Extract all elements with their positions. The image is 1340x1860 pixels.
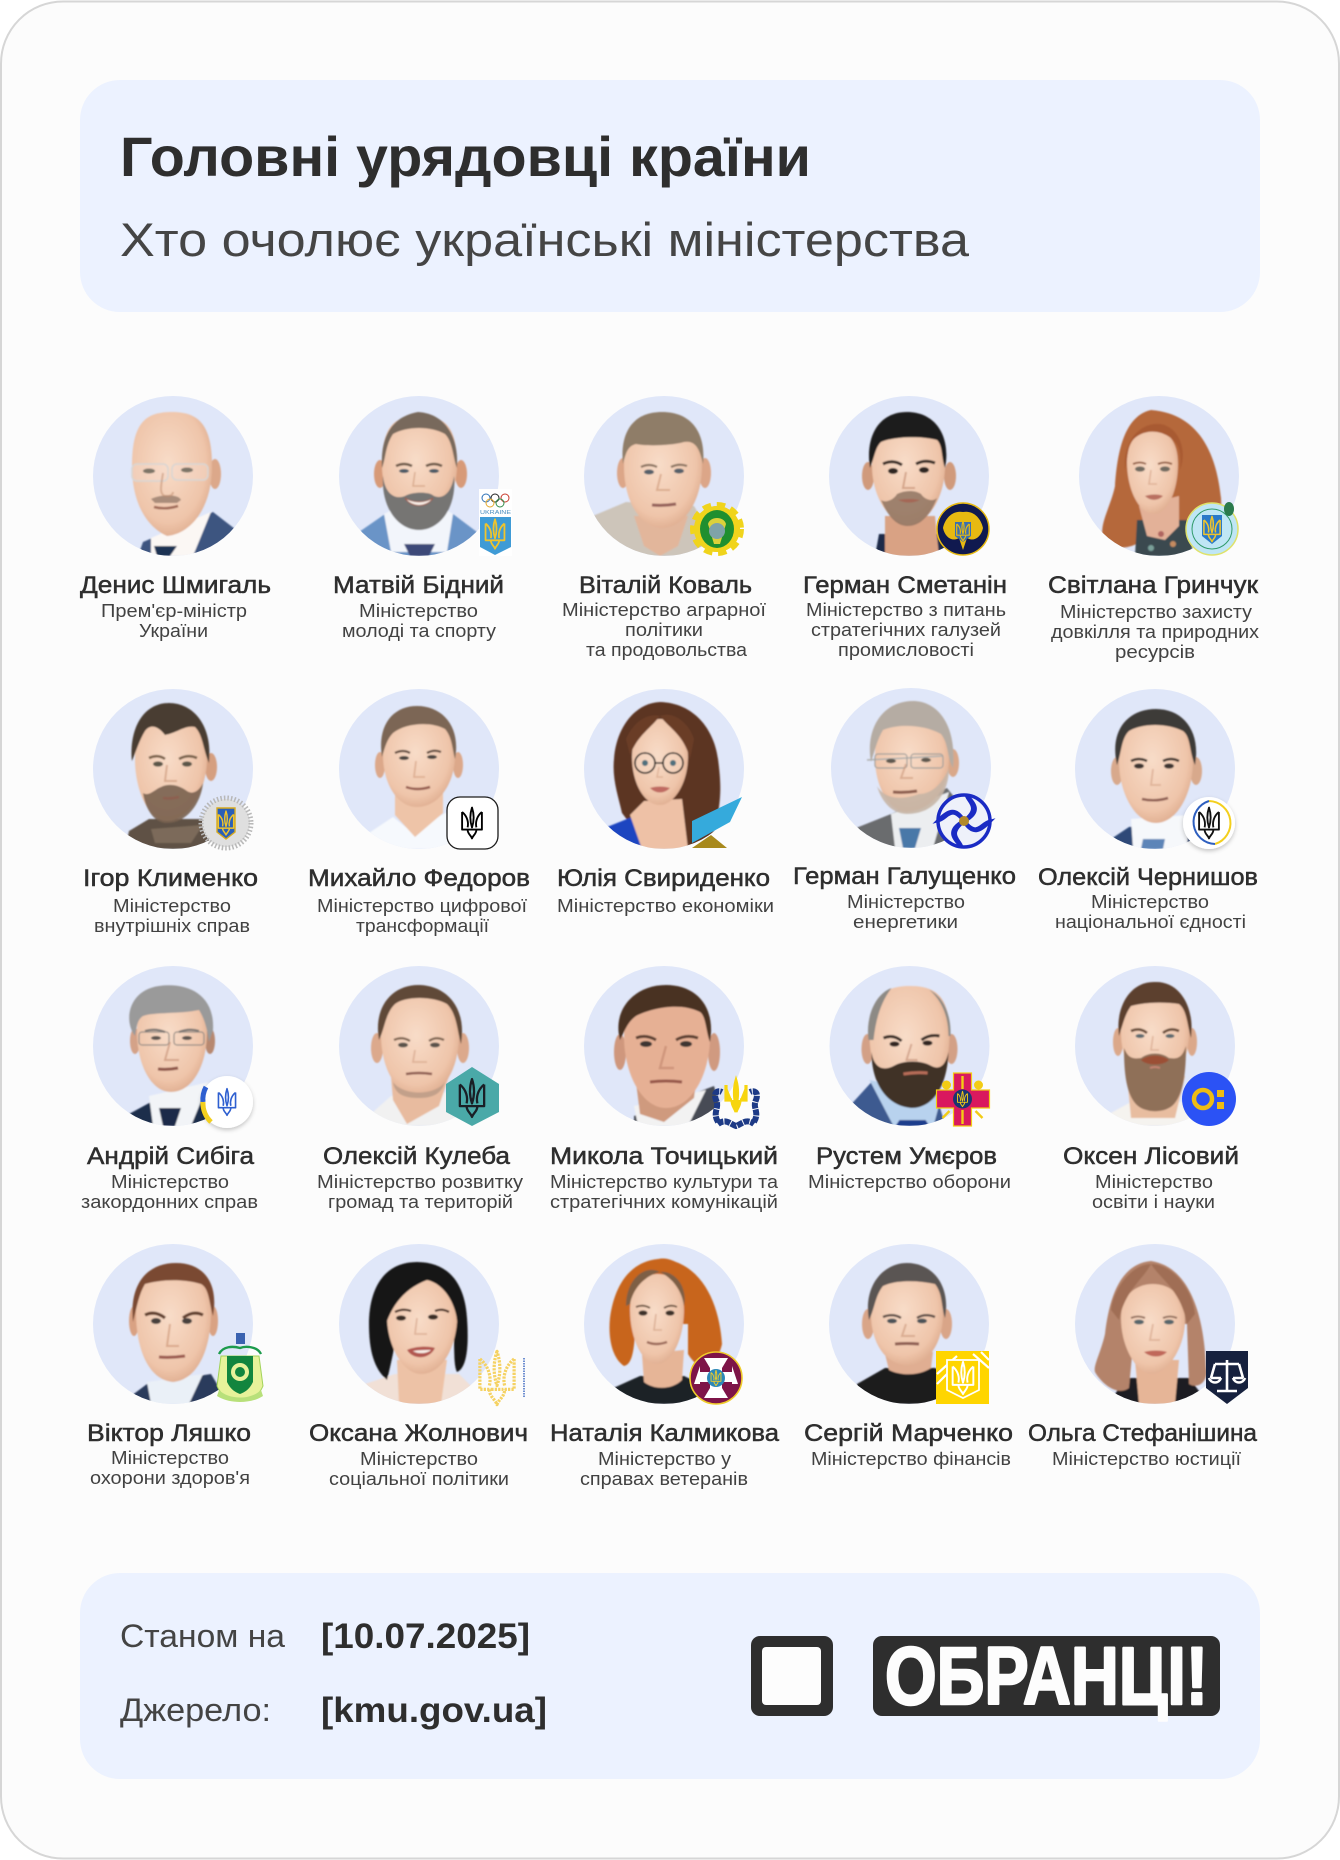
role xyxy=(90,1448,250,1488)
name: Герман Галущенко xyxy=(793,863,1016,890)
role: громад та територій xyxy=(328,1192,513,1212)
name: Юлія Свириденко xyxy=(557,865,770,892)
role xyxy=(1092,1172,1215,1212)
date label: Станом на xyxy=(120,1618,285,1654)
icon: national unity ministry badge xyxy=(1183,797,1235,849)
name: Оксана Жолнович xyxy=(309,1420,528,1447)
person: Олексій Чернишов xyxy=(1038,689,1258,932)
icon: strategic industries badge xyxy=(937,503,989,555)
person: Віталій Коваль xyxy=(562,396,766,660)
icon: energy ministry badge xyxy=(938,795,990,847)
icon: agrarian ministry gear badge xyxy=(694,506,740,552)
name: Михайло Федоров xyxy=(308,865,530,892)
subtitle: Хто очолює українські міністерства xyxy=(120,213,970,266)
role xyxy=(94,896,250,936)
name: Матвій Бідний xyxy=(333,572,504,599)
role xyxy=(329,1449,509,1489)
role: Міністерство xyxy=(111,1172,229,1192)
role xyxy=(562,600,766,660)
icon: digital ministry badge xyxy=(447,797,498,849)
role: Міністерство xyxy=(111,1448,229,1468)
person: Андрій Сибіга xyxy=(81,966,258,1212)
role xyxy=(317,896,527,936)
icon: defence ministry cross badge xyxy=(936,1073,990,1126)
role xyxy=(580,1449,748,1489)
source value: [kmu.gov.ua] xyxy=(321,1691,547,1730)
role: закордонних справ xyxy=(81,1192,258,1212)
person: Наталія Калмикова xyxy=(550,1244,780,1489)
person: Віктор Ляшко xyxy=(87,1244,263,1488)
role: національної єдності xyxy=(1055,912,1246,932)
role: ресурсів xyxy=(1115,642,1195,662)
role: Міністерство xyxy=(847,892,965,912)
person: Оксен Лісовий xyxy=(1063,966,1239,1212)
name: Олексій Чернишов xyxy=(1038,864,1258,891)
role: внутрішніх справ xyxy=(94,916,250,936)
role: Міністерство цифрової xyxy=(317,896,527,916)
person: Матвій Бідний xyxy=(333,396,512,641)
role: Міністерство xyxy=(360,1449,478,1469)
role: справах ветеранів xyxy=(580,1469,748,1489)
role xyxy=(317,1172,523,1212)
role: Міністерство xyxy=(113,896,231,916)
panel: header xyxy=(80,80,1260,312)
icon: social policy dotted trident xyxy=(480,1351,524,1405)
name: Андрій Сибіга xyxy=(87,1143,255,1170)
person: Герман Сметанін xyxy=(803,396,1007,660)
role: стратегічних комунікацій xyxy=(550,1192,778,1212)
person: Ольга Стефанішина xyxy=(1028,1244,1258,1469)
role: Міністерство у xyxy=(598,1449,731,1469)
icon: police star badge xyxy=(201,798,251,848)
icon: foreign affairs badge xyxy=(201,1076,253,1128)
role: енергетики xyxy=(853,912,958,932)
role: освіти і науки xyxy=(1092,1192,1215,1212)
icon: finance ministry badge xyxy=(936,1351,989,1404)
role: політики xyxy=(625,620,703,640)
person: Рустем Умєров xyxy=(808,966,1011,1192)
name: Віталій Коваль xyxy=(579,572,752,599)
role: трансформації xyxy=(356,916,489,936)
role xyxy=(1051,602,1259,662)
icon: environment ministry badge xyxy=(1186,502,1238,555)
role: України xyxy=(139,621,208,641)
person: Ігор Клименко xyxy=(83,689,258,936)
icon: olympic committee badge xyxy=(479,489,512,556)
date value: [10.07.2025] xyxy=(321,1617,530,1656)
role: довкілля та природних xyxy=(1051,622,1259,642)
person: Світлана Гринчук xyxy=(1048,396,1259,662)
role: Міністерство xyxy=(1091,892,1209,912)
icon: education ministry badge xyxy=(1182,1072,1236,1126)
name: Герман Сметанін xyxy=(803,572,1007,599)
icon: communities ministry badge xyxy=(446,1067,499,1126)
role xyxy=(342,601,496,641)
name: Сергій Марченко xyxy=(804,1420,1013,1447)
name: Микола Точицький xyxy=(550,1143,778,1170)
icon: veterans ministry badge xyxy=(690,1352,742,1404)
role: Міністерство оборони xyxy=(808,1172,1011,1192)
role xyxy=(806,600,1006,660)
role xyxy=(101,601,247,641)
name: Віктор Ляшко xyxy=(87,1420,251,1447)
person: Сергій Марченко xyxy=(804,1244,1013,1469)
panel: footer xyxy=(80,1573,1260,1779)
role xyxy=(1055,892,1246,932)
role xyxy=(550,1172,779,1212)
name: Наталія Калмикова xyxy=(550,1420,780,1447)
role: молоді та спорту xyxy=(342,621,496,641)
role: Міністерство юстиції xyxy=(1052,1449,1241,1469)
role: промисловості xyxy=(838,640,974,660)
role: соціальної політики xyxy=(329,1469,509,1489)
person: Денис Шмигаль xyxy=(80,396,271,641)
logo: square mark xyxy=(751,1636,833,1716)
role: Міністерство з питань xyxy=(806,600,1006,620)
role: Міністерство xyxy=(1095,1172,1213,1192)
person: Олексій Кулеба xyxy=(317,966,523,1212)
icon: justice ministry badge xyxy=(1206,1351,1248,1404)
person: Микола Точицький xyxy=(550,966,779,1212)
person: Михайло Федоров xyxy=(308,689,530,936)
role: Міністерство аграрної xyxy=(562,600,766,620)
role: та продовольства xyxy=(586,640,748,660)
name: Денис Шмигаль xyxy=(80,572,271,599)
role: Міністерство xyxy=(359,601,478,621)
name: Ольга Стефанішина xyxy=(1028,1420,1258,1447)
logo: wordmark: ОБРАНЦІ! xyxy=(885,1631,1208,1722)
role: Прем'єр-міністр xyxy=(101,601,247,621)
title: Головні урядовці країни xyxy=(120,125,811,188)
person: Юлія Свириденко xyxy=(557,689,774,916)
role: Міністерство культури та xyxy=(550,1172,779,1192)
name: Олексій Кулеба xyxy=(323,1143,511,1170)
role: Міністерство захисту xyxy=(1060,602,1252,622)
role: стратегічних галузей xyxy=(811,620,1001,640)
name: Рустем Умєров xyxy=(816,1143,997,1170)
role xyxy=(81,1172,258,1212)
icon: olympic committee badge: UKRAINE xyxy=(480,510,511,516)
role: Міністерство економіки xyxy=(557,896,774,916)
role: Міністерство фінансів xyxy=(811,1449,1011,1469)
name: Оксен Лісовий xyxy=(1063,1143,1239,1170)
role xyxy=(847,892,965,932)
name: Світлана Гринчук xyxy=(1048,572,1259,599)
role: Міністерство розвитку xyxy=(317,1172,523,1192)
source label: Джерело: xyxy=(120,1692,271,1728)
icon: health ministry badge xyxy=(217,1333,263,1402)
icon: economy ministry badge xyxy=(692,797,742,848)
role: охорони здоров'я xyxy=(90,1468,250,1488)
icon: culture ministry badge xyxy=(715,1081,757,1126)
name: Ігор Клименко xyxy=(83,865,258,892)
person: Оксана Жолнович xyxy=(309,1244,528,1489)
person: Герман Галущенко xyxy=(793,688,1016,932)
